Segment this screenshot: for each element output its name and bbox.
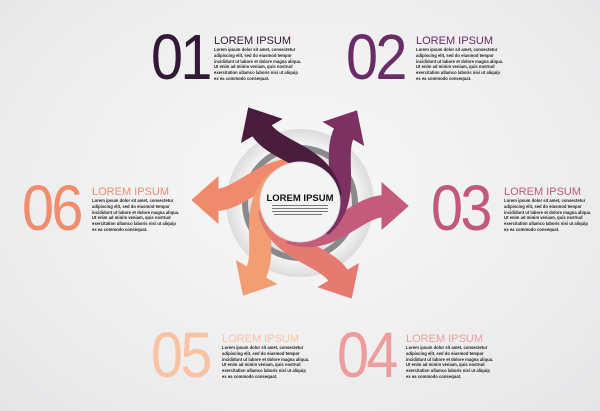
block 05 [151,319,309,391]
text 05: Lorem ipsum dolor sit amet, consectetur [222,346,303,351]
outer light ring [226,129,374,277]
arrow 05 bottom-left [217,178,322,307]
block 01 [151,21,301,93]
grey ring [242,145,358,261]
text 02: incididunt ut labore et dolore magna aliqua. [416,60,503,65]
text 06: Lorem ipsum dolor sit amet, consectetur [92,199,173,204]
text 06: adipiscing elit, sed do eiusmod tempor [92,205,170,210]
text 01: Lorem ipsum dolor sit amet, consectetur [214,48,295,53]
number 06: 06 [22,172,81,244]
arrow 01 top-left [229,93,334,222]
text 05: exercitation ullamco laboris nisi ut aliquip [222,369,306,374]
text 03: adipiscing elit, sed do eiusmod tempor [504,205,582,210]
text 04: Lorem ipsum dolor sit amet, consectetur [406,346,487,351]
block 02 [346,21,503,93]
text 02: Ut enim ad minim veniam, quis nostrud [416,65,495,70]
text 05: adipiscing elit, sed do eiusmod tempor [222,352,300,357]
text 04: Ut enim ad minim veniam, quis nostrud [406,363,485,368]
text 06: exercitation ullamco laboris nisi ut aliquip [92,222,176,227]
text 01: exercitation ullamco laboris nisi ut aliquip [214,71,298,76]
title 02: LOREM IPSUM [416,35,493,47]
text 01: Ut enim ad minim veniam, quis nostrud [214,65,293,70]
text 04: adipiscing elit, sed do eiusmod tempor [406,352,484,357]
text 06: incididunt ut labore et dolore magna aliqua. [92,211,179,216]
number 04: 04 [337,319,396,391]
center circle [260,162,340,242]
text 03: Ut enim ad minim veniam, quis nostrud [504,216,583,221]
title 05: LOREM IPSUM [222,333,299,345]
text 03: incididunt ut labore et dolore magna aliqua. [504,211,591,216]
number 01: 01 [151,21,210,93]
number 05: 05 [151,319,210,391]
arrow 02 top-right [278,99,383,228]
title 01: LOREM IPSUM [214,35,291,47]
block 04 [337,319,493,391]
central arrow wheel [191,107,409,299]
text 01: ex ea commodo consequat. [214,77,269,82]
text 03: ex ea commodo consequat. [504,228,559,233]
text 03: Lorem ipsum dolor sit amet, consectetur [504,199,585,204]
number 02: 02 [346,21,405,93]
text 05: Ut enim ad minim veniam, quis nostrud [222,363,301,368]
text 01 [214,48,301,82]
center title: LOREM IPSUM [266,193,334,204]
text 05 [222,346,309,380]
text 04 [406,346,493,380]
text 01: adipiscing elit, sed do eiusmod tempor [214,54,292,59]
text 05: ex ea commodo consequat. [222,375,277,380]
text 03 [504,198,591,233]
text 04: exercitation ullamco laboris nisi ut aliquip [406,369,490,374]
center text [272,205,328,215]
number 03: 03 [431,172,490,244]
text 04: incididunt ut labore et dolore magna aliqua. [406,358,493,363]
arrow 03 right [290,183,408,236]
text 04: ex ea commodo consequat. [406,375,461,380]
arrow 06 left [192,170,310,223]
text 02: exercitation ullamco laboris nisi ut aliquip [416,71,500,76]
block 03 [431,172,591,244]
text 06 [92,198,179,233]
text 06: Ut enim ad minim veniam, quis nostrud [92,216,171,221]
text 06: ex ea commodo consequat. [92,228,147,233]
title 04: LOREM IPSUM [406,333,483,345]
text 02: Lorem ipsum dolor sit amet, consectetur [416,48,497,53]
text 02: adipiscing elit, sed do eiusmod tempor [416,54,494,59]
text 05: incididunt ut labore et dolore magna aliqua. [222,358,309,363]
text 01: incididunt ut labore et dolore magna aliqua. [214,60,301,65]
text 02 [416,48,503,82]
title 03: LOREM IPSUM [504,186,581,198]
text 03: exercitation ullamco laboris nisi ut aliquip [504,222,588,227]
arrow 04 bottom-right [266,184,371,313]
title 06: LOREM IPSUM [92,186,169,198]
block 06 [22,172,179,244]
text 02: ex ea commodo consequat. [416,77,471,82]
